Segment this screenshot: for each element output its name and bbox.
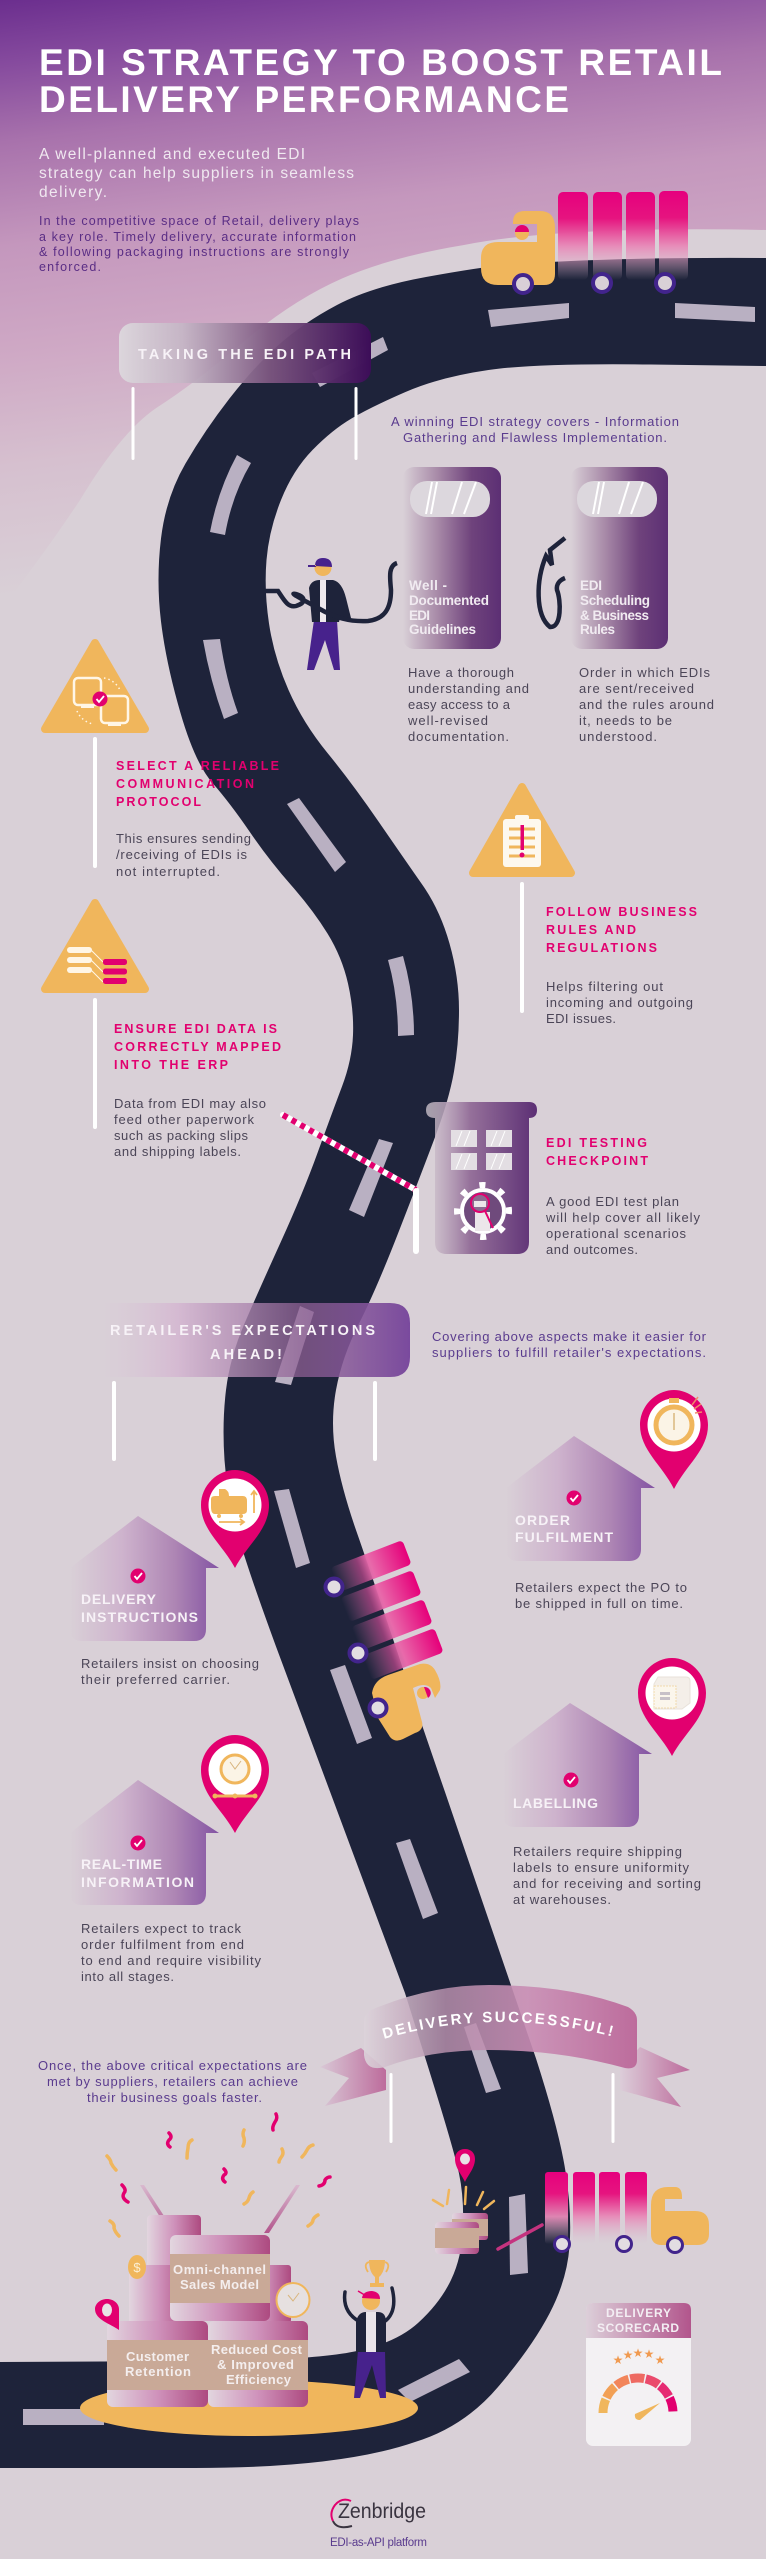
house: order fulfilment: FULFILMENT xyxy=(515,1529,613,1545)
rating stars: ★ xyxy=(613,2353,623,2367)
house: labelling xyxy=(503,1703,652,1827)
step: select a reliable communication protocol xyxy=(45,643,279,879)
panel: EDI scheduling and business rules xyxy=(571,467,668,649)
box: omni-channel sales model: Omni-channel xyxy=(173,2262,266,2277)
text: scheduling description: are sent/received xyxy=(579,681,694,696)
house: delivery instructions: DELIVERY xyxy=(81,1591,157,1607)
panel: EDI scheduling and business rules: & Business xyxy=(580,608,649,623)
text: EDI testing checkpoint: operational scenarios xyxy=(546,1226,686,1241)
delivery truck on road xyxy=(326,1540,444,1741)
rating stars: ★ xyxy=(644,2347,654,2361)
text: scheduling description xyxy=(579,665,714,744)
icon: striped barrier gate xyxy=(283,1115,419,1254)
text: covering above aspects: Covering above aspects make it easier for xyxy=(432,1329,707,1344)
panel: EDI scheduling and business rules: Rules xyxy=(580,622,615,637)
sign: retailer's expectations ahead xyxy=(100,1303,410,1461)
intro paragraph: In the competitive space of Retail, delivery plays xyxy=(39,214,359,228)
text: business goals xyxy=(38,2058,307,2105)
step: select a reliable communication protocol: This ensures sending xyxy=(116,831,251,846)
text: EDI testing checkpoint: CHECKPOINT xyxy=(546,1154,648,1168)
panel: well-documented EDI guidelines: Documented xyxy=(409,593,489,608)
ribbon: delivery successful: DELIVERY SUCCESSFUL! xyxy=(382,2012,613,2038)
panel: EDI scheduling and business rules: EDI xyxy=(580,578,602,593)
house: real-time information: REAL-TIME xyxy=(81,1856,162,1872)
back boxes xyxy=(129,2215,291,2323)
title: EDI STRATEGY TO BOOST RETAIL xyxy=(39,42,722,83)
text: labelling description: at warehouses. xyxy=(513,1892,611,1907)
confetti xyxy=(107,2114,330,2236)
step: ensure EDI data is correctly mapped xyxy=(45,903,281,1159)
step: follow business rules and regulations: REGULATIONS xyxy=(546,941,657,955)
text: winning strategy: Gathering and Flawless Implementation. xyxy=(403,430,667,445)
intro text: strategy can help suppliers in seamless xyxy=(39,165,354,182)
ribbon: delivery successful xyxy=(321,1985,690,2143)
text: delivery instructions description: Retailers insist on choosing xyxy=(81,1656,259,1671)
text: order fulfilment description: be shipped in full on time. xyxy=(515,1596,683,1611)
stage ellipse xyxy=(80,2380,418,2436)
intro text: delivery. xyxy=(39,184,107,201)
step: select a reliable communication protocol: not interrupted. xyxy=(116,864,220,879)
pin: shipping label xyxy=(638,1658,706,1756)
icon: clipboard warning triangle xyxy=(473,787,571,873)
box: customer retention: Customer xyxy=(126,2349,189,2364)
icon: data mapping warning triangle xyxy=(45,903,145,989)
box: customer retention: Retention xyxy=(125,2364,191,2379)
box: reduced cost and improved efficiency: Reduced Cost xyxy=(211,2342,303,2357)
box: omni-channel sales model: Sales Model xyxy=(180,2277,259,2292)
text: real-time description: order fulfilment from end xyxy=(81,1937,244,1952)
text: EDI testing checkpoint: A good EDI test plan xyxy=(546,1194,679,1209)
text: labelling description: and for receiving and sorting xyxy=(513,1876,701,1891)
step: follow business rules and regulations: incoming and outgoing xyxy=(546,995,693,1010)
box: omni-channel sales model xyxy=(170,2235,270,2321)
step: ensure EDI data is correctly mapped: CORRECTLY MAPPED xyxy=(114,1040,281,1054)
intro paragraph xyxy=(39,214,359,274)
cake of business goals xyxy=(107,2215,308,2407)
box: reduced cost and improved efficiency: Efficiency xyxy=(226,2372,292,2387)
icon: dollar coin xyxy=(128,2255,146,2279)
title xyxy=(39,42,722,120)
delivery scorecard xyxy=(586,2303,691,2448)
step: ensure EDI data is correctly mapped: feed other paperwork xyxy=(114,1112,254,1127)
text: scheduling description: and the rules around xyxy=(579,697,714,712)
text: real-time description: to end and require visibility xyxy=(81,1953,262,1968)
step: select a reliable communication protocol: PROTOCOL xyxy=(116,795,201,809)
purple gradient header background xyxy=(0,0,766,640)
icon: dollar coin: $ xyxy=(133,2260,141,2275)
icon: second fuel hose xyxy=(539,538,565,627)
step: ensure EDI data is correctly mapped: Data from EDI may also xyxy=(114,1096,266,1111)
text: business goals: their business goals faster. xyxy=(87,2090,262,2105)
box: reduced cost and improved efficiency: & Improved xyxy=(217,2357,294,2372)
bottom edge strip xyxy=(0,2559,766,2560)
text: business goals: met by suppliers, retailers can achieve xyxy=(47,2074,298,2089)
text: labelling description: labels to ensure uniformity xyxy=(513,1860,690,1875)
winner person with trophy xyxy=(345,2260,394,2398)
rating stars: ★ xyxy=(655,2353,665,2367)
step: ensure EDI data is correctly mapped: INTO THE ERP xyxy=(114,1058,228,1072)
step: select a reliable communication protocol: COMMUNICATION xyxy=(116,777,254,791)
text: winning strategy xyxy=(391,414,679,445)
text: guidelines description: easy access to a xyxy=(408,697,511,712)
step: follow business rules and regulations xyxy=(473,787,697,1026)
step: select a reliable communication protocol: SELECT A RELIABLE xyxy=(116,759,279,773)
text: labelling description xyxy=(513,1844,701,1907)
confetti poppers xyxy=(140,2185,300,2233)
text: delivery instructions description: their preferred carrier. xyxy=(81,1672,230,1687)
panel: EDI scheduling and business rules: Scheduling xyxy=(580,593,650,608)
step: follow business rules and regulations: FOLLOW BUSINESS xyxy=(546,905,697,919)
icon: small location pin xyxy=(95,2299,119,2330)
delivery truck top xyxy=(481,191,688,293)
pin: stopwatch xyxy=(640,1390,708,1489)
step: ensure EDI data is correctly mapped: and shipping labels. xyxy=(114,1144,241,1159)
gauge xyxy=(603,2378,673,2448)
sign: retailer's expectations ahead: AHEAD! xyxy=(210,1347,282,1363)
house: order fulfilment xyxy=(506,1436,655,1561)
step: follow business rules and regulations: EDI issues. xyxy=(546,1011,616,1026)
house: order fulfilment: ORDER xyxy=(515,1512,570,1528)
icon: testing checkpoint building xyxy=(426,1102,537,1254)
house: delivery instructions: INSTRUCTIONS xyxy=(81,1609,198,1625)
text: guidelines description: well-revised xyxy=(407,713,488,728)
rating stars: ★ xyxy=(623,2348,633,2362)
sign: taking the EDI path: TAKING THE EDI PATH xyxy=(138,347,351,363)
intro paragraph: & following packaging instructions are strongly xyxy=(39,245,350,259)
intro text xyxy=(39,146,354,201)
tagline: EDI-as-API platform xyxy=(330,2537,427,2549)
text: guidelines description xyxy=(407,665,529,744)
box: customer retention xyxy=(107,2321,208,2407)
step: select a reliable communication protocol: /receiving of EDIs is xyxy=(116,847,248,862)
text: EDI testing checkpoint: EDI TESTING xyxy=(546,1136,647,1150)
intro paragraph: a key role. Timely delivery, accurate information xyxy=(39,230,356,244)
road lane dashes xyxy=(23,303,755,2425)
house: real-time information xyxy=(70,1780,219,1905)
sign: retailer's expectations ahead: RETAILER'S EXPECTATIONS xyxy=(110,1323,375,1339)
gauge needle xyxy=(635,2403,660,2420)
sign: taking the EDI path xyxy=(119,323,371,460)
step: ensure EDI data is correctly mapped: ENSURE EDI DATA IS xyxy=(114,1022,277,1036)
box: reduced cost and improved efficiency xyxy=(208,2321,308,2407)
rating stars: ★ xyxy=(633,2346,643,2360)
panel: well-documented EDI guidelines: Well - xyxy=(409,578,447,593)
house: labelling: LABELLING xyxy=(513,1795,598,1811)
text: EDI testing checkpoint: will help cover all likely xyxy=(545,1210,700,1225)
delivery scorecard: DELIVERY xyxy=(606,2306,671,2320)
text: order fulfilment description xyxy=(515,1580,687,1611)
icon: fuel attendant with hose xyxy=(264,558,397,670)
intro paragraph: enforced. xyxy=(39,260,101,274)
text: guidelines description: Have a thorough xyxy=(408,665,514,680)
panel: well-documented EDI guidelines: EDI xyxy=(409,608,430,623)
title: DELIVERY PERFORMANCE xyxy=(39,79,569,120)
text: guidelines description: documentation. xyxy=(408,729,509,744)
text: covering above aspects xyxy=(432,1329,707,1360)
text: scheduling description: understood. xyxy=(579,729,657,744)
text: business goals: Once, the above critical expectations are xyxy=(38,2058,307,2073)
panel: well-documented EDI guidelines: Guidelines xyxy=(409,622,476,637)
text: delivery instructions description xyxy=(81,1656,259,1687)
text: labelling description: Retailers require shipping xyxy=(513,1844,682,1859)
house: delivery instructions xyxy=(70,1516,219,1641)
text: scheduling description: it, needs to be xyxy=(579,713,672,728)
pin: truck direction xyxy=(201,1470,269,1568)
icon: destination pin xyxy=(455,2149,475,2182)
text: real-time description: Retailers expect to track xyxy=(81,1921,242,1936)
panel: well-documented EDI guidelines xyxy=(403,467,501,649)
text: real-time description: into all stages. xyxy=(81,1969,174,1984)
text: EDI testing checkpoint xyxy=(545,1136,700,1257)
intro text: A well-planned and executed EDI xyxy=(39,146,305,163)
step: follow business rules and regulations: RULES AND xyxy=(546,923,636,937)
text: guidelines description: understanding and xyxy=(408,681,529,696)
text: real-time description xyxy=(81,1921,262,1984)
step: ensure EDI data is correctly mapped: such as packing slips xyxy=(114,1128,248,1143)
house: real-time information: INFORMATION xyxy=(81,1874,194,1890)
icon: clock xyxy=(276,2283,310,2317)
logo: Zenbridge: Zenbridge xyxy=(338,2500,426,2523)
icon: delivered parcels with rays xyxy=(433,2187,494,2254)
step: follow business rules and regulations: Helps filtering out xyxy=(546,979,663,994)
delivery truck bottom xyxy=(498,2172,709,2252)
pin: clock xyxy=(201,1735,269,1833)
text: order fulfilment description: Retailers expect the PO to xyxy=(515,1580,687,1595)
text: winning strategy: A winning EDI strategy covers - Information xyxy=(391,414,679,429)
text: covering above aspects: suppliers to fulfill retailer's expectations. xyxy=(432,1345,706,1360)
text: EDI testing checkpoint: and outcomes. xyxy=(546,1242,638,1257)
delivery scorecard: SCORECARD xyxy=(597,2321,679,2335)
text: scheduling description: Order in which EDIs xyxy=(579,665,710,680)
icon: communication warning triangle xyxy=(45,643,145,729)
rating stars xyxy=(613,2346,665,2367)
